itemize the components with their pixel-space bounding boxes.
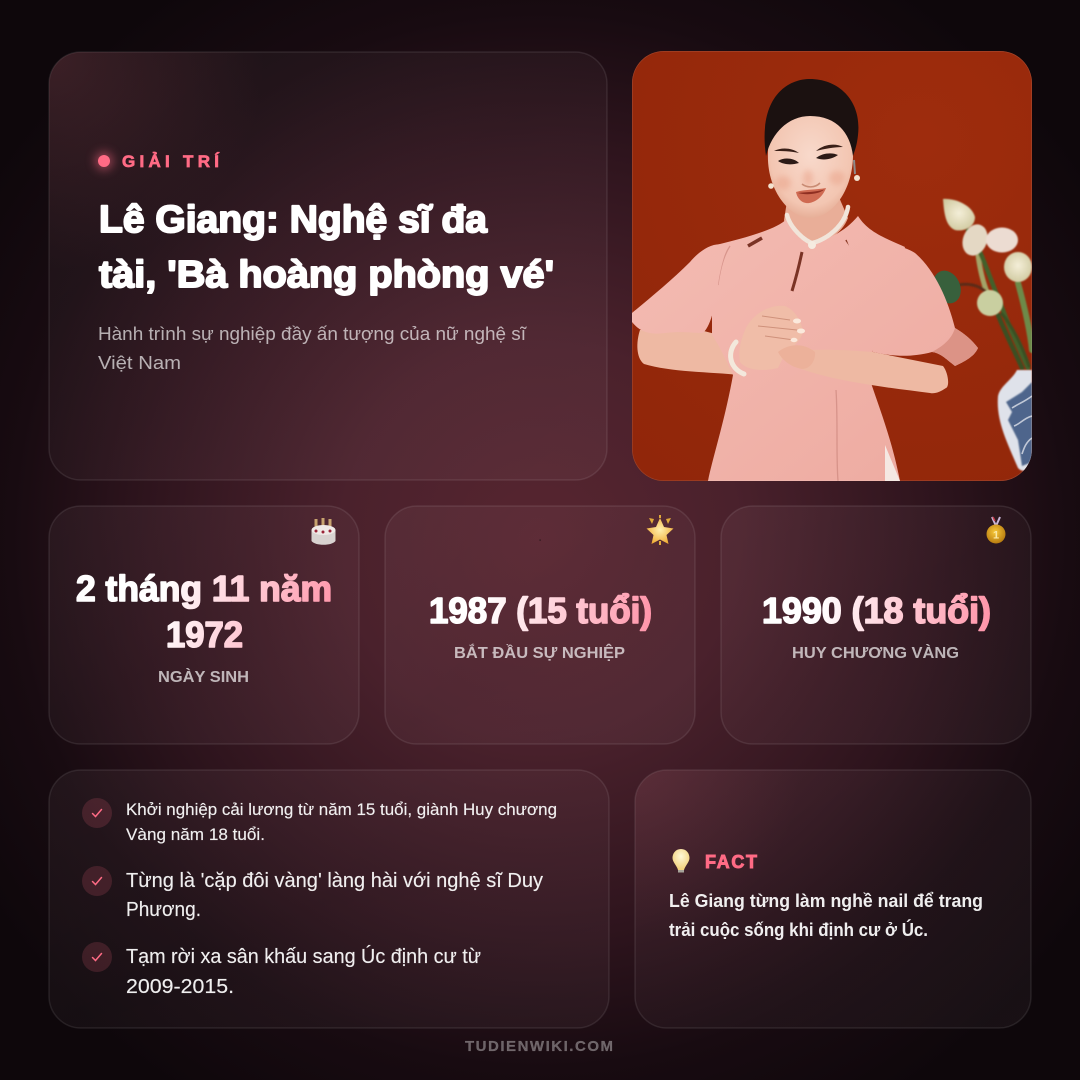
- illustration: near arm: [637, 330, 733, 374]
- illustration: left sleeve: [632, 244, 728, 334]
- fact text: trải cuộc sống khi định cư ở Úc.: [669, 919, 928, 940]
- illustration: vase: [998, 370, 1032, 471]
- panel: stat birth date: [49, 506, 359, 744]
- illustration: lotus buds: [943, 199, 1032, 316]
- stat label: BẮT ĐẦU SỰ NGHIỆP: [454, 644, 625, 662]
- illustration: hands: [739, 306, 815, 370]
- illustration: right sleeve: [846, 238, 978, 366]
- fact text: [669, 890, 983, 940]
- illustration: lotus leaf: [934, 270, 961, 304]
- stat label: NGÀY SINH: [158, 669, 249, 686]
- list item 2: Từng là 'cặp đôi vàng' làng hài với nghệ sĩ Duy: [126, 869, 544, 892]
- subtitle: [98, 323, 527, 373]
- icon: gold medal: [986, 517, 1006, 544]
- illustration: head: [765, 79, 860, 218]
- stat value: [76, 568, 332, 655]
- fact text: Lê Giang từng làm nghề nail để trang: [669, 890, 983, 911]
- category tag: GIẢI TRÍ: [122, 152, 220, 171]
- illustration: dress seams: [718, 246, 838, 481]
- list item 3: Tạm rời xa sân khấu sang Úc định cư từ: [126, 945, 481, 968]
- panel: stat career start: [385, 506, 695, 744]
- illustration: pearl necklace: [787, 207, 848, 243]
- panel: hero title card: [49, 52, 607, 480]
- panel: stat gold medal: [721, 506, 1031, 744]
- list item 2: Phương.: [126, 898, 201, 921]
- illustration: far arm: [838, 352, 948, 394]
- stat value: 1990 (18 tuổi): [762, 590, 991, 631]
- fact heading: FACT: [705, 852, 757, 872]
- stat value: 1972: [166, 614, 243, 655]
- subtitle: Việt Nam: [98, 352, 181, 373]
- illustration: dress body: [708, 216, 905, 481]
- list item 1: Vàng năm 18 tuổi.: [126, 826, 265, 844]
- title: Lê Giang: Nghệ sĩ đa: [99, 199, 488, 241]
- illustration: pearl bracelet: [731, 342, 744, 374]
- title: tài, 'Bà hoàng phòng vé': [99, 254, 554, 296]
- list item 3: 2009-2015.: [126, 975, 234, 998]
- footer brand: TUDIENWIKI.COM: [465, 1038, 613, 1055]
- stat value: 2 tháng 11 năm: [76, 568, 332, 609]
- list item 1: Khởi nghiệp cải lương từ năm 15 tuổi, giành Huy chương: [126, 801, 557, 819]
- icon: light bulb: [672, 849, 690, 872]
- list item 2: [82, 866, 544, 921]
- list item 3: [82, 942, 481, 998]
- panel: fact card: [635, 770, 1031, 1028]
- stat label: HUY CHƯƠNG VÀNG: [792, 645, 959, 662]
- panel: portrait photo: [632, 51, 1032, 481]
- subtitle: Hành trình sự nghiệp đầy ấn tượng của nữ nghệ sĩ: [98, 323, 527, 344]
- icon: gold medal: 1: [993, 530, 999, 542]
- list item 1: [82, 798, 557, 844]
- illustration: neck: [784, 200, 848, 241]
- title: [99, 199, 554, 296]
- icon: glowing star: [646, 515, 674, 545]
- panel: key points list: [49, 770, 609, 1028]
- icon: birthday cake: [312, 518, 336, 545]
- illustration: lotus stems: [958, 230, 1032, 368]
- stat value: 1987 (15 tuổi): [429, 590, 652, 631]
